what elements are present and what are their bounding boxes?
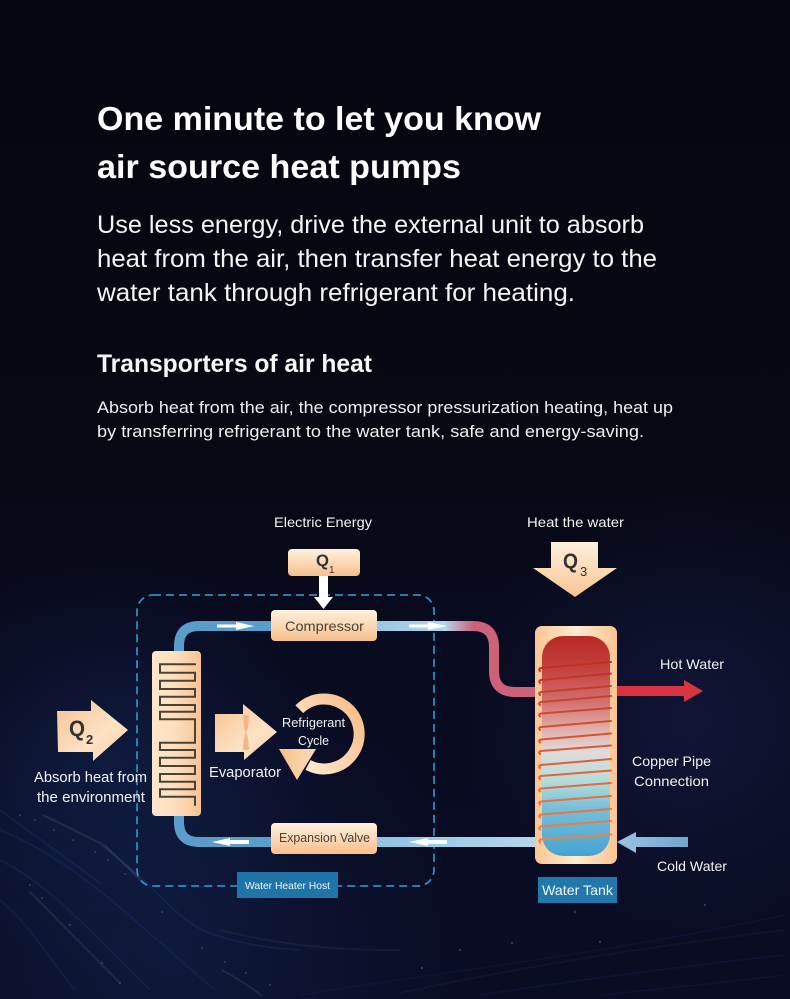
absorb heat label: Absorb heat from [34, 770, 147, 786]
compressor box [271, 610, 377, 641]
water heater host dashed boundary [137, 595, 434, 886]
flow arrow: top left [217, 622, 254, 630]
Q1 input box: 1 [329, 565, 335, 576]
Q3 arrow [533, 542, 617, 597]
flow arrow: bottom right [409, 838, 447, 846]
refrigerant cycle ring arrow [279, 699, 359, 780]
water tank label: Water Tank [542, 882, 614, 898]
description text block [97, 398, 673, 441]
cold water label: Cold Water [657, 858, 727, 874]
refrigerant cycle ring arrow: Refrigerant [282, 716, 346, 730]
Q2 arrow [57, 700, 128, 761]
expansion valve box: Expansion Valve [279, 830, 370, 845]
copper pipe label [632, 753, 711, 789]
copper pipe label: Copper Pipe [632, 753, 711, 769]
electric energy label: Electric Energy [274, 514, 372, 530]
Q2 arrow: Q [69, 716, 85, 741]
flow arrow: bottom left [212, 838, 249, 846]
cold water arrow [617, 832, 688, 853]
title: One minute to let you know [97, 101, 542, 138]
absorb heat label: the environment [37, 790, 145, 806]
evaporator label: Evaporator [209, 765, 281, 781]
Q3 arrow: Q [563, 550, 578, 573]
copper coil [539, 662, 611, 842]
intro text block: water tank through refrigerant for heating. [96, 279, 575, 307]
flow arrow: top right [409, 622, 447, 630]
evaporator coil panel [152, 651, 201, 816]
hot water label: Hot Water [660, 656, 724, 672]
intro text block: Use less energy, drive the external unit to absorb [97, 211, 644, 239]
evaporator fan arrow [215, 704, 277, 760]
refrigerant cycle ring arrow: Cycle [298, 734, 329, 748]
hot water arrow [617, 680, 703, 702]
water tank [535, 626, 617, 864]
heat pump diagram [34, 514, 727, 903]
description text block: Absorb heat from the air, the compressor pressurization heating, heat up [97, 398, 673, 417]
absorb heat label [34, 770, 147, 806]
Q1 input box: Q [316, 551, 329, 570]
expansion valve box [271, 823, 377, 854]
subheading: Transporters of air heat [97, 350, 373, 378]
Q2 arrow: 2 [86, 732, 93, 747]
refrigerant pipes [179, 626, 537, 842]
description text block: by transferring refrigerant to the water tank, safe and energy-saving. [97, 422, 644, 441]
water tank label [538, 877, 617, 903]
Q1 input box [288, 549, 360, 576]
water heater host label: Water Heater Host [245, 880, 330, 892]
water heater host label [237, 872, 338, 898]
intro text block: heat from the air, then transfer heat energy to the [97, 245, 657, 273]
heat the water label: Heat the water [527, 514, 624, 530]
Q3 arrow: 3 [580, 564, 587, 579]
title: air source heat pumps [97, 149, 461, 186]
arrow: Q1 to compressor [314, 576, 333, 609]
copper pipe label: Connection [634, 773, 709, 789]
title [97, 101, 542, 186]
compressor box: Compressor [285, 618, 364, 634]
intro text block [96, 211, 657, 307]
